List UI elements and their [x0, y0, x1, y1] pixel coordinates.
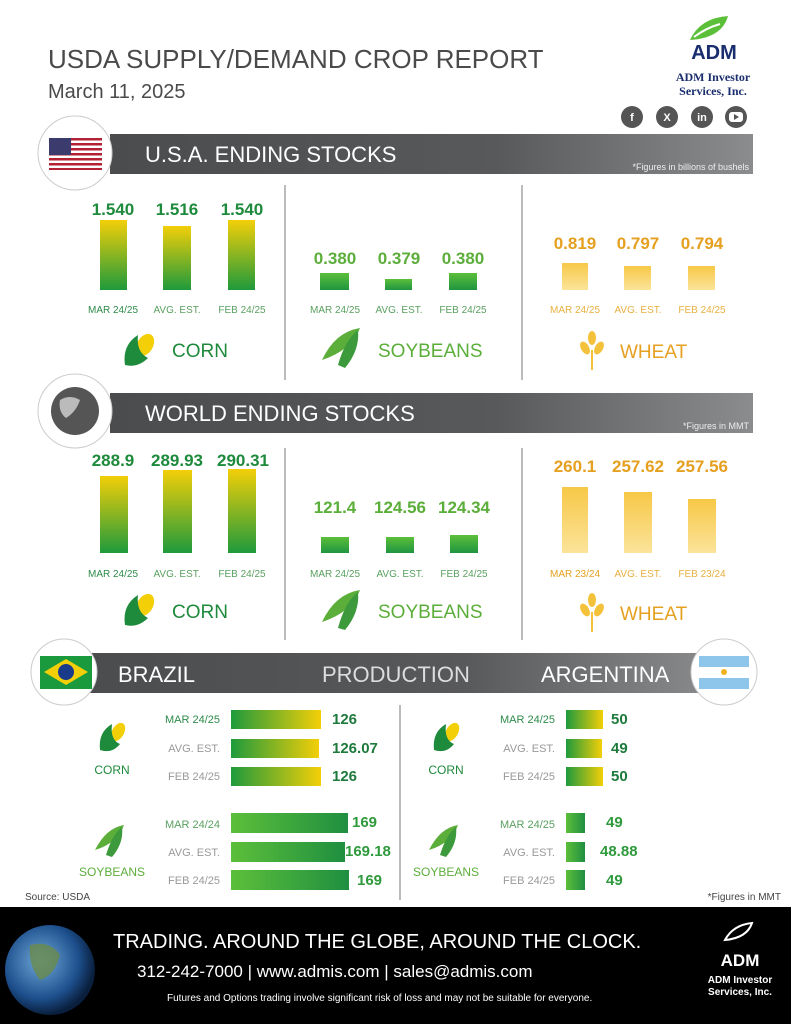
chart: world corn: 289.93: [151, 451, 203, 470]
chart: USA soybeans: AVG. EST.: [375, 305, 423, 316]
text: CORN: [172, 341, 228, 362]
footer: ADM Investor: [708, 975, 772, 986]
chart: world wheat: MAR 23/24: [550, 569, 600, 580]
chart: USA wheat: 0.819: [554, 234, 596, 253]
logo: ADM: [676, 16, 751, 98]
chart: Brazil production: FEB 24/25: [168, 771, 220, 783]
banner: production: [31, 639, 757, 705]
chart: world soybeans: 124.34: [438, 498, 491, 517]
text: CORN: [172, 602, 228, 623]
chart: USA corn: 1.540: [221, 200, 263, 219]
title: [48, 44, 544, 103]
chart: Argentina production: 49: [606, 872, 623, 889]
chart: USA corn: MAR 24/25: [88, 305, 138, 316]
chart: USA wheat: FEB 24/25: [678, 305, 726, 316]
chart: Brazil production: MAR 24/25: [165, 714, 220, 726]
banner: USA ending stocks: *Figures in billions of bushels: [632, 162, 749, 172]
chart: world soybeans: AVG. EST.: [376, 569, 424, 580]
chart: Argentina production: FEB 24/25: [503, 875, 555, 887]
chart: USA wheat: 0.797: [617, 234, 659, 253]
banner: production: ARGENTINA: [541, 662, 670, 687]
chart: world wheat: [550, 457, 728, 580]
social icons: in: [697, 112, 707, 124]
title: March 11, 2025: [48, 81, 186, 103]
title: USDA SUPPLY/DEMAND CROP REPORT: [48, 44, 544, 74]
chart: USA corn: [88, 200, 266, 316]
chart: Argentina production: [413, 710, 638, 890]
text: WHEAT: [620, 342, 688, 363]
chart: world wheat: AVG. EST.: [614, 569, 662, 580]
logo: ADM: ADM Investor: [676, 70, 751, 84]
banner: production: PRODUCTION: [322, 662, 470, 687]
source note: Source: USDA: [25, 892, 90, 903]
chart: world soybeans: 121.4: [314, 498, 357, 517]
footer: [0, 907, 791, 1024]
icon: corn USA: [125, 331, 158, 366]
chart: Argentina production: AVG. EST.: [503, 847, 555, 859]
banner: world ending stocks: WORLD ENDING STOCKS: [145, 401, 415, 426]
chart: Brazil production: 169.18: [345, 843, 391, 860]
chart: Brazil production: 169: [357, 872, 382, 889]
chart: Argentina production: MAR 24/25: [500, 714, 555, 726]
chart: world wheat: FEB 23/24: [678, 569, 726, 580]
chart: USA corn: 1.516: [156, 200, 198, 219]
chart: Brazil production: CORN: [94, 763, 130, 777]
chart: Brazil production: MAR 24/24: [165, 819, 220, 831]
social icons: X: [663, 112, 671, 124]
chart: Argentina production: 48.88: [600, 843, 638, 860]
chart: Brazil production: AVG. EST.: [168, 743, 220, 755]
chart: Brazil production: 169: [352, 814, 377, 831]
banner: USA ending stocks: [38, 116, 753, 190]
chart: USA soybeans: MAR 24/25: [310, 305, 360, 316]
icon: wheat world: [578, 593, 606, 632]
chart: Argentina production: AVG. EST.: [503, 743, 555, 755]
banner: USA ending stocks: U.S.A. ENDING STOCKS: [145, 142, 396, 167]
chart: Brazil production: FEB 24/25: [168, 875, 220, 887]
chart: world corn: FEB 24/25: [218, 569, 266, 580]
chart: world soybeans: MAR 24/25: [310, 569, 360, 580]
logo: ADM: ADM: [691, 42, 737, 64]
chart: world corn: MAR 24/25: [88, 569, 138, 580]
chart: USA soybeans: FEB 24/25: [439, 305, 487, 316]
chart: USA soybeans: 0.380: [314, 249, 356, 268]
social icons: [621, 106, 747, 128]
chart: Argentina production: 50: [611, 711, 628, 728]
chart: Argentina production: 49: [606, 814, 623, 831]
text: WHEAT: [620, 604, 688, 625]
footer: ADM: [721, 951, 759, 970]
icon: soybean world: [322, 590, 360, 630]
chart: Brazil production: 126: [332, 768, 357, 785]
chart: Argentina production: FEB 24/25: [503, 771, 555, 783]
chart: USA soybeans: [310, 249, 487, 316]
chart: world soybeans: FEB 24/25: [440, 569, 488, 580]
chart: Argentina production: CORN: [428, 763, 464, 777]
chart: USA wheat: [550, 234, 726, 316]
footer: 312-242-7000 | www.admis.com | sales@admis.com: [137, 962, 533, 981]
chart: USA soybeans: 0.380: [442, 249, 484, 268]
chart: world wheat: 257.56: [676, 457, 728, 476]
chart: world wheat: 260.1: [554, 457, 596, 476]
chart: world corn: 288.9: [92, 451, 134, 470]
units note: *Figures in MMT: [708, 892, 781, 903]
footer: Services, Inc.: [708, 987, 772, 998]
chart: Brazil production: 126: [332, 711, 357, 728]
chart: world corn: 290.31: [217, 451, 269, 470]
chart: Brazil production: [79, 710, 391, 890]
chart: Argentina production: MAR 24/25: [500, 819, 555, 831]
chart: USA soybeans: 0.379: [378, 249, 420, 268]
icon: soybean USA: [322, 328, 360, 368]
chart: USA wheat: 0.794: [681, 234, 724, 253]
chart: world corn: AVG. EST.: [153, 569, 201, 580]
chart: world soybeans: 124.56: [374, 498, 426, 517]
chart: Argentina production: SOYBEANS: [413, 865, 479, 879]
chart: world soybeans: [310, 498, 491, 580]
footer: Futures and Options trading involve significant risk of loss and may not be suitable for everyone.: [167, 993, 592, 1004]
chart: USA wheat: MAR 24/25: [550, 305, 600, 316]
chart: Brazil production: 126.07: [332, 740, 378, 757]
chart: USA corn: FEB 24/25: [218, 305, 266, 316]
banner: production: BRAZIL: [118, 662, 195, 687]
chart: world corn: [88, 451, 269, 580]
chart: Argentina production: 49: [611, 740, 628, 757]
footer: TRADING. AROUND THE GLOBE, AROUND THE CLOCK.: [113, 931, 641, 953]
social icons: f: [630, 112, 634, 124]
icon: corn world: [125, 591, 158, 626]
icon: wheat USA: [578, 331, 606, 370]
chart: USA corn: 1.540: [92, 200, 134, 219]
text: SOYBEANS: [378, 602, 483, 623]
chart: world wheat: 257.62: [612, 457, 664, 476]
banner: world ending stocks: *Figures in MMT: [683, 421, 749, 431]
chart: Brazil production: AVG. EST.: [168, 847, 220, 859]
chart: USA corn: AVG. EST.: [153, 305, 201, 316]
logo: ADM: Services, Inc.: [679, 84, 747, 98]
chart: Brazil production: SOYBEANS: [79, 865, 145, 879]
text: SOYBEANS: [378, 341, 483, 362]
banner: world ending stocks: [38, 374, 753, 448]
chart: Argentina production: 50: [611, 768, 628, 785]
chart: USA wheat: AVG. EST.: [614, 305, 662, 316]
